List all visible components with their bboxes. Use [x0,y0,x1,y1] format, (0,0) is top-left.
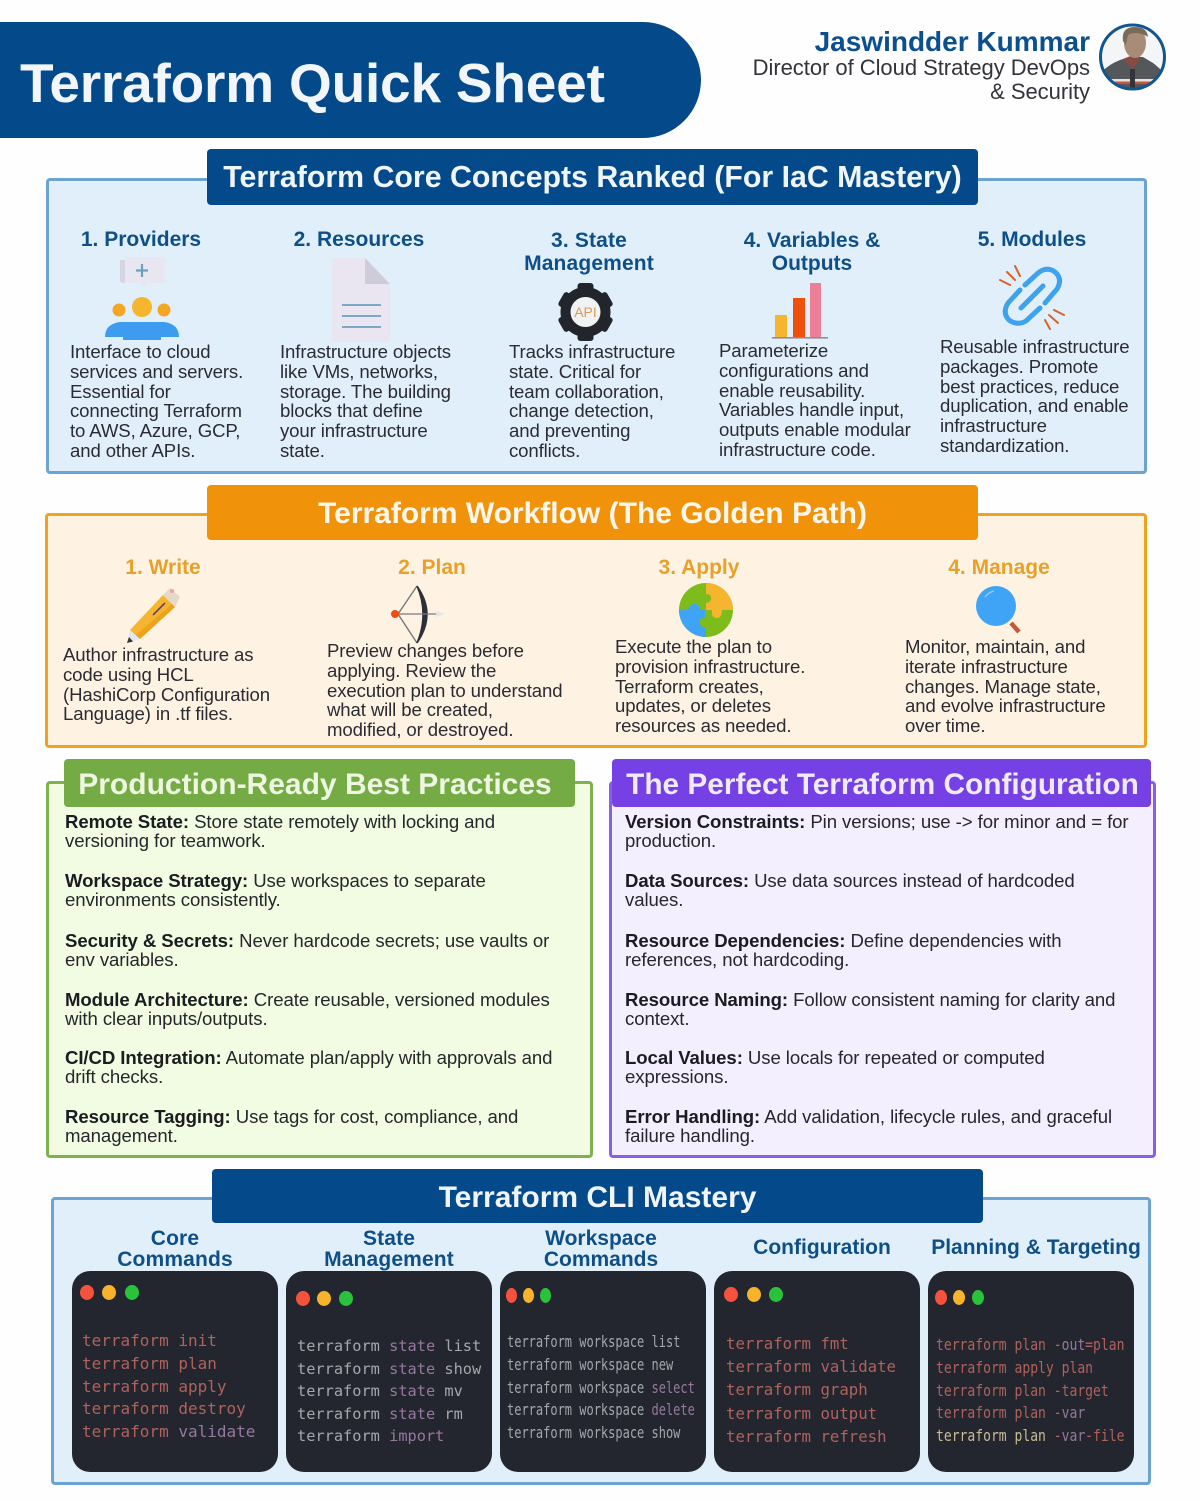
terminal: terraform workspace show [507,1423,680,1442]
heading: 2. Plan [398,556,466,579]
text: team collaboration, [509,381,664,402]
terminal: terraform plan -var-file [936,1426,1124,1445]
heading [744,229,880,275]
terminal: terraform workspace list [507,1332,680,1351]
terminal: terraform init [82,1331,217,1350]
item: version constraints [625,811,1129,851]
text: best practices, reduce [940,376,1119,397]
heading [117,1228,233,1270]
panel: core concepts [46,178,1147,474]
heading: 4. Variables & [744,229,880,252]
terminal: terraform apply plan [936,1358,1093,1377]
heading: Commands [117,1248,233,1271]
author name: Jaswindder Kummar [815,26,1090,57]
text: like VMs, networks, [280,361,438,382]
text: applying. Review the [327,660,496,681]
panel: workflow [45,513,1147,748]
practice: workspace strategy [65,870,486,910]
icon: puzzle globe [679,583,733,637]
terminal: terraform state mv [297,1382,463,1400]
panel: perfect configuration [609,781,1156,1158]
best practices list [65,811,552,1146]
practice: remote state [65,811,495,851]
terminal [286,1271,492,1472]
text: infrastructure [940,415,1047,436]
terminal [72,1271,278,1472]
practice: module architecture: with clear inputs/outputs. [65,1008,268,1028]
heading [544,1228,658,1270]
practice: security and secrets: env variables. [65,949,179,970]
text: connecting Terraform [70,400,242,421]
text [905,636,1106,736]
author portrait [1099,24,1166,90]
text: updates, or deletes [615,695,771,716]
text: and other APIs. [70,440,195,461]
configuration list [625,811,1129,1146]
heading: 1. Write [125,556,201,579]
icon: bar chart [772,283,828,339]
text [63,644,270,724]
text: resources as needed. [615,715,791,736]
terminal: terraform import [297,1427,444,1445]
text: changes. Manage state, [905,676,1101,697]
text: and evolve infrastructure [905,695,1106,716]
panel: CLI mastery [51,1197,1151,1485]
text: storage. The building [280,381,451,402]
heading: CLI mastery [212,1169,983,1223]
heading: Planning & Targeting [931,1236,1141,1259]
concept 2: resources [280,228,451,461]
heading: Management [324,1248,454,1271]
practice: cicd integration: drift checks. [65,1066,163,1087]
text: modified, or destroyed. [327,719,513,740]
step 2: plan [327,556,562,740]
item: resource naming: context. [625,1008,689,1028]
icon: API gear [558,283,613,341]
heading: 3. Apply [659,556,739,579]
text: what will be created, [327,699,493,720]
terminal: terraform state rm [297,1404,463,1422]
author block [753,24,1166,104]
heading: perfect configuration [612,759,1151,807]
icon: team with speech bubble [105,257,179,340]
item: resource naming: Resource Naming: Follow consistent naming for clarity and [625,988,1115,1010]
text: Execute the plan to [615,636,772,657]
text: Variables handle input, [719,399,904,420]
text: Language) in .tf files. [63,703,233,724]
concept 3: state management [509,229,675,461]
author role: Director of Cloud Strategy DevOps [753,55,1090,80]
text: blocks that define [280,400,423,421]
heading: core concepts: Terraform Core Concepts Ranked (For IaC Mastery) [223,161,962,194]
heading: 4. Manage [948,556,1050,579]
text: change detection, [509,400,654,421]
text: your infrastructure [280,420,428,441]
heading: CLI mastery: Terraform CLI Mastery [439,1181,756,1214]
text: conflicts. [509,440,580,461]
text [615,636,805,736]
heading: 5. Modules [978,228,1086,251]
text: duplication, and enable [940,395,1128,416]
text [70,341,243,461]
heading: best practices: Production-Ready Best Practices [78,768,552,801]
icon: document [332,258,390,342]
item: error handling [625,1107,1112,1145]
text: provision infrastructure. [615,656,805,677]
text: Terraform creates, [615,676,764,697]
panel: best practices [46,781,593,1158]
title banner [0,22,701,138]
heading: core concepts [207,149,978,205]
text: Essential for [70,381,171,402]
heading: best practices [64,759,575,807]
text [280,341,451,461]
text: enable reusability. [719,380,865,401]
concept 5: modules [940,228,1129,456]
text: Tracks infrastructure [509,341,675,362]
text: Preview changes before [327,640,524,661]
text: (HashiCorp Configuration [63,684,270,705]
practice: workspace strategy: environments consistently. [65,889,281,910]
CLI group: workspace commands [500,1228,706,1472]
concept 1: providers [70,228,243,461]
item: data sources [625,870,1075,910]
item: local values [625,1048,1045,1086]
practice: cicd integration: CI/CD Integration: Automate plan/apply with approvals and [65,1047,552,1068]
text: Reusable infrastructure [940,336,1129,357]
concept 4: variables and outputs [719,229,911,460]
heading: Configuration [753,1236,891,1259]
heading: workflow: Terraform Workflow (The Golden Path) [318,497,867,530]
text: state. [280,440,325,461]
terminal: terraform state show [297,1360,481,1378]
CLI group: configuration [714,1228,920,1472]
practice: module architecture [65,988,550,1029]
item: data sources: values. [625,889,683,910]
practice: security and secrets: Security & Secrets: Never hardcode secrets; use vaults or [65,930,549,951]
heading: Management [524,252,654,275]
text: services and servers. [70,361,243,382]
text: Monitor, maintain, and [905,636,1085,657]
text [719,340,911,460]
item: resource naming [625,990,1115,1028]
heading: Core [151,1227,199,1250]
practice: workspace strategy: Workspace Strategy: Use workspaces to separate [65,870,486,891]
terminal: terraform workspace delete [507,1400,695,1419]
terminal [714,1271,920,1472]
practice: resource tagging [65,1106,518,1146]
practice: remote state: versioning for teamwork. [65,830,266,851]
author role: & Security [990,79,1090,104]
item: local values: expressions. [625,1066,728,1087]
heading: Workspace [545,1227,657,1250]
item: data sources: Data Sources: Use data sources instead of hardcoded [625,870,1075,891]
text: iterate infrastructure [905,656,1068,677]
terminal: terraform plan [82,1354,217,1373]
CLI group: planning and targeting [928,1228,1135,1472]
icon: pencil [127,588,180,643]
text: to AWS, Azure, GCP, [70,420,240,441]
icon: chain link [999,265,1065,330]
text: over time. [905,715,985,736]
terminal: terraform fmt [726,1334,849,1353]
step 3: apply [615,556,805,736]
text: Interface to cloud [70,341,210,362]
text: packages. Promote [940,356,1098,377]
terminal [928,1271,1134,1472]
CLI group: core commands [72,1228,278,1472]
terminal: terraform state list [297,1337,481,1355]
step 1: write [63,556,270,724]
item: resource dependencies: references, not hardcoding. [625,949,849,970]
heading: workflow [207,485,978,540]
text: Infrastructure objects [280,341,451,362]
icon: magnifier [976,586,1021,634]
text [327,640,562,740]
terminal: terraform apply [82,1377,226,1396]
heading: State [363,1227,415,1250]
terminal: terraform plan -var [936,1403,1085,1422]
text: execution plan to understand [327,680,562,701]
terminal: terraform plan -target [936,1381,1109,1400]
heading: 1. Providers [81,228,201,251]
author role [753,55,1090,104]
heading: 3. State [551,229,627,252]
text: outputs enable modular [719,419,911,440]
text: standardization. [940,435,1069,456]
heading: Commands [544,1248,658,1271]
title: Terraform Quick Sheet [20,52,605,114]
item: version constraints: Version Constraints: Pin versions; use -> for minor and = for [625,811,1129,832]
terminal: terraform refresh [726,1427,887,1446]
item: local values: Local Values: Use locals for repeated or computed [625,1047,1045,1068]
item: error handling: Error Handling: Add validation, lifecycle rules, and graceful [625,1106,1112,1127]
terminal [500,1271,706,1472]
text: Author infrastructure as [63,644,253,665]
text: code using HCL [63,664,194,685]
text: configurations and [719,360,869,381]
terminal: terraform workspace new [507,1355,673,1374]
heading: 2. Resources [294,228,424,251]
item: resource dependencies [625,931,1062,969]
practice: security and secrets [65,930,549,970]
terminal: terraform destroy [82,1399,246,1418]
CLI group: state management [286,1228,492,1472]
icon: bow and arrow [391,586,444,644]
terminal: terraform validate [82,1422,255,1441]
icon: API gear: API [574,304,597,320]
text: and preventing [509,420,630,441]
item: version constraints: production. [625,830,716,851]
practice: resource tagging: Resource Tagging: Use tags for cost, compliance, and [65,1106,518,1127]
terminal: terraform plan -out=plan [936,1335,1124,1354]
practice: cicd integration [65,1047,552,1087]
practice: remote state: Remote State: Store state remotely with locking and [65,811,495,832]
terminal: terraform validate [726,1357,896,1376]
practice: resource tagging: management. [65,1125,178,1146]
heading [524,229,654,275]
heading: Outputs [772,252,852,275]
item: error handling: failure handling. [625,1125,755,1146]
text [509,341,675,461]
step 4: manage [905,556,1106,736]
terminal: terraform workspace select [507,1378,695,1397]
heading: perfect configuration: The Perfect Terraform Configuration [626,768,1139,801]
heading [324,1228,454,1270]
text: Parameterize [719,340,828,361]
text: state. Critical for [509,361,641,382]
terminal: terraform output [726,1404,877,1423]
practice: module architecture: Module Architecture: Create reusable, versioned modules [65,988,550,1010]
item: resource dependencies: Resource Dependencies: Define dependencies with [625,930,1062,951]
text: infrastructure code. [719,439,876,460]
terminal: terraform graph [726,1380,868,1399]
text [940,336,1129,456]
